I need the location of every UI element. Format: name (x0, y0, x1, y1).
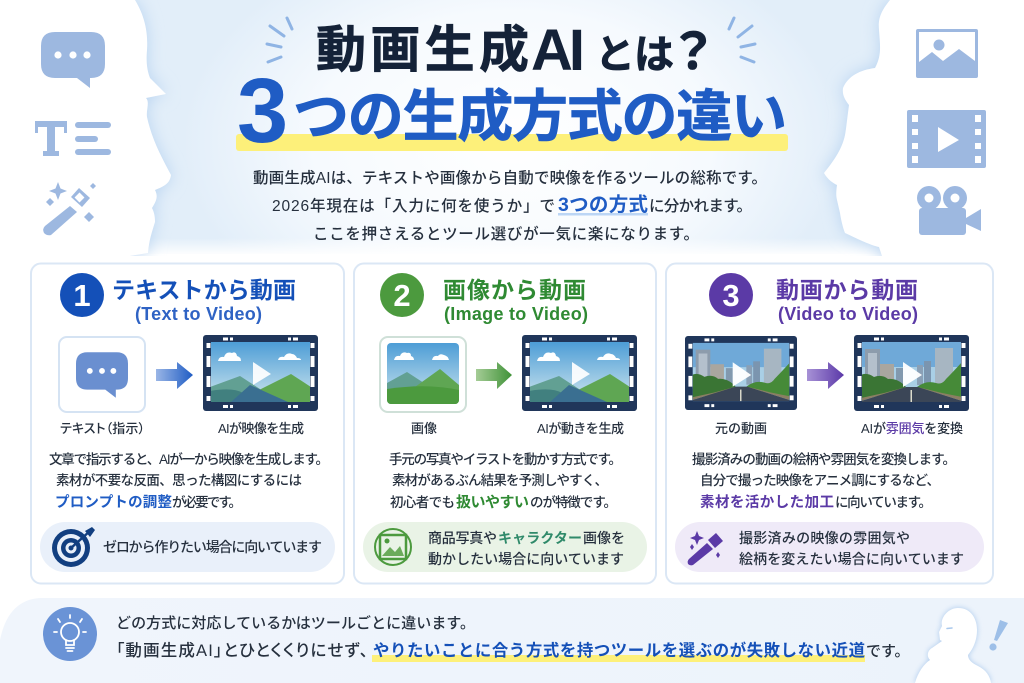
icon: target (52, 527, 95, 567)
description: 素材を活かした加工 (700, 494, 834, 511)
right head silhouette (824, 0, 1024, 262)
title line 1 kana: とは (595, 33, 674, 77)
input image box (380, 337, 466, 412)
title numeral: 3 (237, 60, 288, 162)
heading: テキストから動画 (112, 277, 296, 303)
intro text (253, 169, 767, 243)
film output (522, 335, 637, 411)
description: 初心者でも (390, 495, 455, 510)
note text: やりたいことに合う方式を持つツールを選ぶのが失敗しない近道 (373, 641, 865, 660)
subheading: (Image to Video) (444, 304, 588, 324)
decorative sparks left (267, 18, 292, 62)
note text (116, 614, 910, 662)
description (692, 451, 956, 511)
label input: 元の動画 (715, 421, 767, 436)
description (389, 451, 622, 511)
decorative sparks right (729, 18, 755, 62)
description (49, 451, 329, 511)
label output: AIが映像を生成 (218, 421, 304, 436)
label input: 画像 (411, 421, 437, 436)
arrow (807, 362, 844, 389)
panel: text to video (31, 264, 344, 584)
pill: 絵柄を変えたい場合に向いています (739, 551, 964, 567)
badge 2 (380, 273, 424, 317)
left head silhouette (0, 0, 171, 262)
icon: wand (688, 531, 723, 565)
arrow (156, 362, 193, 389)
pill (363, 522, 647, 572)
title line 1 AI: AI (531, 18, 585, 83)
title highlight (236, 134, 788, 151)
pill (675, 522, 984, 572)
person thinking (915, 608, 991, 683)
title line 1 kanji: 動画生成 (316, 22, 529, 78)
icon: magic wand (43, 182, 96, 235)
badge 1 (60, 273, 104, 317)
description: 扱いやすい (456, 493, 529, 511)
film output (854, 335, 969, 411)
title line 2 text: つの生成方式の違い (293, 85, 787, 148)
bottom band (0, 598, 1024, 683)
icon: picture (916, 29, 978, 78)
description: 撮影済みの動画の絵柄や雰囲気を変換します。 (692, 451, 956, 467)
heading: 画像から動画 (443, 277, 586, 303)
intro text: に分かれます。 (649, 197, 752, 215)
panel: video to video (666, 264, 993, 584)
description: 自分で撮った映像をアニメ調にするなど、 (700, 472, 940, 488)
pill: 動かしたい場合に向いています (428, 551, 624, 567)
description: のが特徴です。 (530, 494, 617, 510)
note text: 「動画生成AI」とひとくくりにせず、 (116, 641, 368, 660)
icon: photo (375, 529, 411, 565)
icon: film strip (907, 110, 986, 168)
pill: 画像を (583, 530, 625, 546)
input box with bubble icon (59, 337, 145, 412)
hero background (0, 0, 1024, 256)
pill: ゼロから作りたい場合に向いています (103, 539, 322, 555)
description: に向いています。 (835, 495, 932, 510)
label output: AIが動きを生成 (537, 421, 624, 436)
subheading: (Text to Video) (135, 304, 262, 324)
title (236, 18, 788, 162)
badge 2: 2 (393, 278, 411, 313)
intro text: 動画生成AIは、テキストや画像から自動で映像を作るツールの総称です。 (253, 169, 767, 187)
intro text: 3つの方式 (558, 193, 648, 216)
panel: image to video (354, 264, 656, 584)
pill (40, 522, 335, 572)
film input (685, 336, 797, 410)
pill: キャラクター (498, 530, 582, 546)
description: 手元の写真やイラストを動かす方式です。 (389, 451, 622, 467)
exclamation mark (989, 620, 1008, 651)
note text: です。 (866, 643, 910, 660)
badge 3: 3 (722, 278, 740, 313)
pill: 撮影済みの映像の雰囲気や (739, 530, 910, 546)
description: 素材が不要な反面、思った構図にするには (56, 472, 302, 488)
note text: どの方式に対応しているかはツールごとに違います。 (116, 614, 475, 632)
description: 文章で指示すると、AIが一から映像を生成します。 (49, 451, 329, 467)
label output: AIが雰囲気を変換 (861, 421, 963, 436)
pill: 商品写真や (428, 530, 497, 546)
arrow (476, 362, 512, 389)
description: が必要です。 (172, 494, 242, 510)
film output (203, 335, 318, 411)
subheading: (Video to Video) (778, 304, 918, 324)
badge 3 (709, 273, 753, 317)
intro text: 2026年現在は「入力に何を使うか」で (272, 197, 555, 215)
description: 素材があるぶん結果を予測しやすく、 (392, 472, 608, 488)
icon: text T and lines (35, 121, 111, 156)
heading: 動画から動画 (776, 277, 918, 303)
icon: movie camera (917, 186, 981, 235)
description: プロンプトの調整 (55, 494, 172, 511)
label input: テキスト（指示） (60, 421, 145, 436)
icon: speech bubble (41, 32, 105, 88)
title line 1 question mark: ？ (668, 24, 718, 80)
badge 1: 1 (73, 278, 91, 313)
icon: light bulb (43, 607, 97, 661)
intro text: ここを押さえるとツール選びが一気に楽になります。 (313, 224, 699, 243)
